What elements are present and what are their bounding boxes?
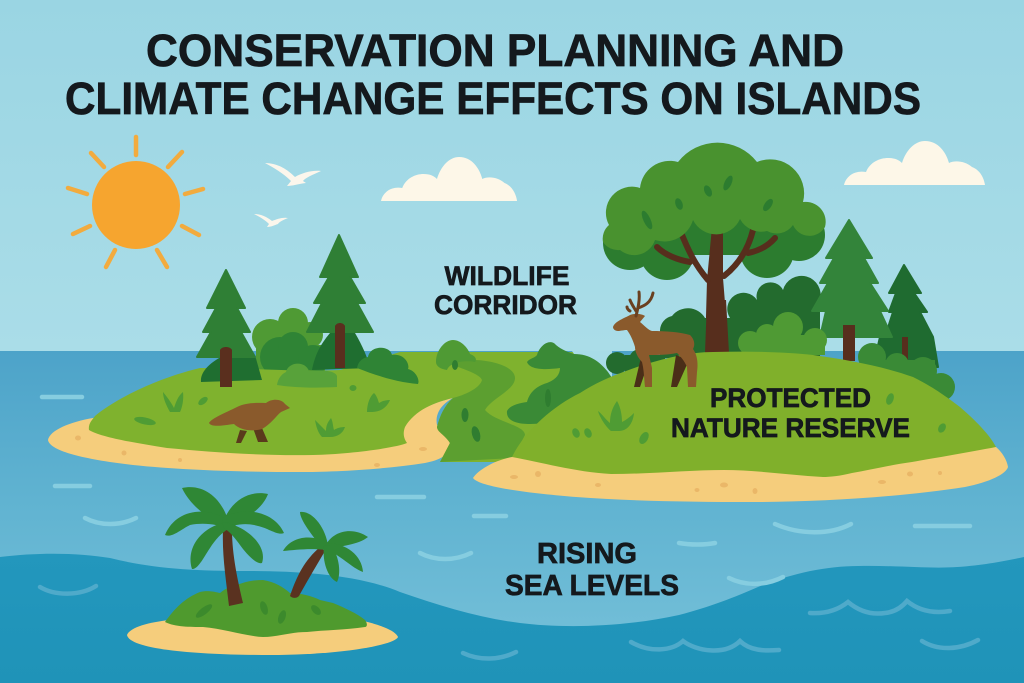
deer body xyxy=(613,314,698,387)
sea xyxy=(0,351,1024,683)
right back bushes xyxy=(606,276,821,375)
palm island grass xyxy=(165,580,367,637)
right island xyxy=(473,143,1008,502)
label: wildlife corridor: CORRIDOR xyxy=(434,290,577,320)
left island grass and corridor land xyxy=(89,352,612,462)
left island xyxy=(48,235,612,472)
left pine left xyxy=(197,270,255,387)
deer far legs xyxy=(634,353,689,387)
big tree lower trunk xyxy=(705,300,729,353)
deer antlers xyxy=(627,292,653,316)
label: protected nature reserve xyxy=(671,383,910,443)
right side bushes xyxy=(858,343,955,401)
corridor path xyxy=(437,358,525,462)
corridor left bush xyxy=(436,340,476,370)
palm trunks xyxy=(223,530,325,606)
big tree xyxy=(603,143,826,353)
left island beach xyxy=(48,398,453,472)
big tree dark canopy xyxy=(603,200,825,280)
label: rising sea levels xyxy=(505,538,679,602)
sand specks right xyxy=(510,471,942,494)
label: wildlife corridor: WILDLIFE xyxy=(444,261,570,291)
tufts and leaves on left island xyxy=(134,385,390,437)
icon: right cloud xyxy=(844,141,985,185)
title: CONSERVATION PLANNING AND xyxy=(146,25,844,76)
right island tuft and leaves xyxy=(571,392,948,446)
corridor right bush xyxy=(507,342,640,424)
right island beach xyxy=(473,440,1008,502)
animal: deer xyxy=(613,292,698,387)
title xyxy=(65,25,921,124)
dark pine xyxy=(873,265,938,367)
green pine xyxy=(812,220,892,361)
water ripples on light water xyxy=(42,397,970,584)
wildlife corridor xyxy=(436,340,640,462)
icon: seagulls xyxy=(254,163,321,227)
sand specks xyxy=(75,436,427,467)
corridor dark leaves xyxy=(452,360,551,443)
left pine right xyxy=(307,235,373,368)
palm island beach xyxy=(127,620,398,655)
palm fronds small xyxy=(283,512,368,582)
big tree trunk xyxy=(657,227,775,353)
title: CLIMATE CHANGE EFFECTS ON ISLANDS xyxy=(65,73,921,124)
palm island leaves xyxy=(194,600,323,625)
big tree canopy marks xyxy=(640,174,775,231)
water ripples on deep water xyxy=(40,586,978,659)
palm island xyxy=(127,487,398,655)
label: protected nature reserve: PROTECTED xyxy=(710,383,871,413)
palm fronds large xyxy=(165,487,284,569)
foreground deep water xyxy=(0,554,1024,683)
left island right bush xyxy=(357,348,419,384)
label: rising sea levels: SEA LEVELS xyxy=(505,570,679,602)
label: protected nature reserve: NATURE RESERVE xyxy=(671,413,910,443)
sky background xyxy=(0,0,1024,352)
left island back bushes xyxy=(252,308,328,377)
right island grass xyxy=(512,352,996,477)
icon: sun xyxy=(68,137,203,267)
animal: otter xyxy=(209,400,290,443)
dark bushes under left pines xyxy=(201,333,370,382)
left island front bush xyxy=(277,364,337,388)
light bush xyxy=(738,312,827,355)
label: wildlife corridor xyxy=(434,261,577,320)
big tree light canopy xyxy=(603,143,826,255)
icon: left cloud xyxy=(381,157,517,201)
label: rising sea levels: RISING xyxy=(537,538,637,570)
sky gap beside corridor xyxy=(572,351,612,378)
